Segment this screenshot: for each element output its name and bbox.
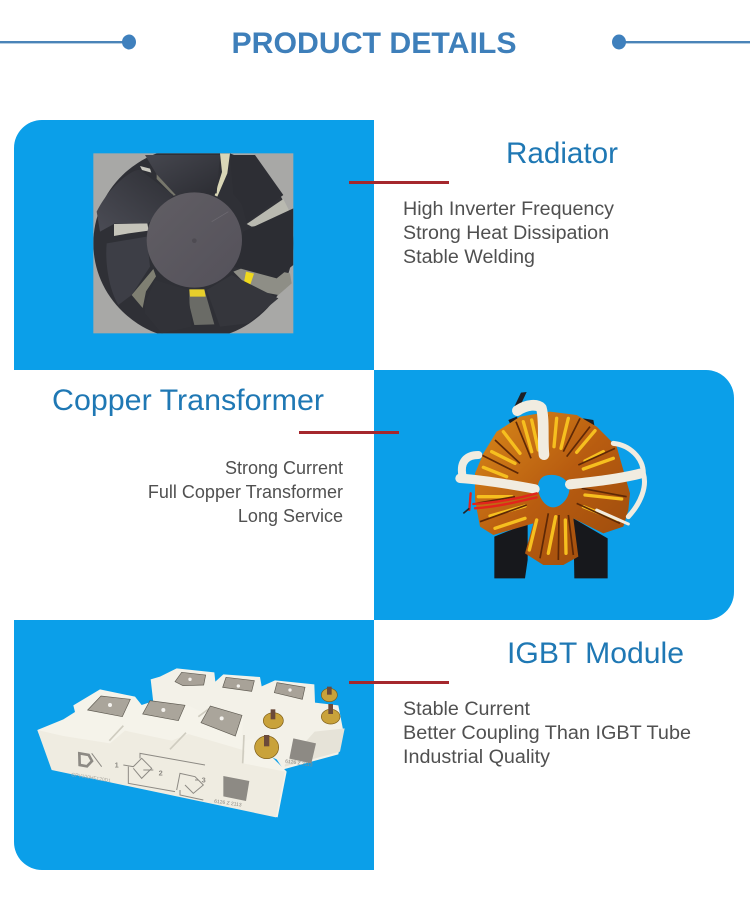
title: PRODUCT DETAILS — [232, 27, 516, 60]
feature list: Strong Heat Dissipation — [403, 222, 609, 244]
heading: Copper Transformer — [52, 384, 324, 417]
heading: Radiator — [506, 137, 618, 170]
groove shadows — [109, 707, 244, 763]
photo: igbt modules: 6126 Z 2113 — [285, 759, 313, 769]
feature list — [148, 458, 343, 526]
logo and circuit markings — [79, 753, 205, 800]
block front faces — [37, 730, 285, 817]
feature list — [403, 698, 691, 768]
fan disc — [93, 147, 293, 340]
fan blades — [97, 155, 293, 333]
rear module — [151, 668, 345, 769]
front module — [37, 689, 287, 817]
header: product details — [0, 27, 750, 60]
white insulation — [460, 405, 644, 524]
heading: IGBT Module — [507, 637, 684, 670]
feature list: Long Service — [238, 506, 343, 526]
feature list: Strong Current — [225, 458, 343, 478]
copper highlights — [478, 418, 622, 553]
blue panel — [374, 370, 734, 620]
photo: toroidal transformer — [460, 392, 644, 578]
copper coil ring — [475, 412, 630, 565]
blue panel — [14, 620, 374, 870]
panel: igbt module text — [349, 637, 691, 768]
panel: copper transformer image — [374, 370, 734, 620]
fan hub — [147, 192, 242, 288]
black feet — [494, 523, 528, 578]
photo: igbt modules — [37, 668, 345, 817]
photo: igbt modules: GPV100HF120D1 — [71, 772, 112, 784]
feature list: High Inverter Frequency — [403, 198, 614, 220]
photo: igbt modules: 1 — [115, 760, 119, 769]
panel: copper transformer text — [52, 384, 399, 526]
connector line — [299, 431, 399, 434]
panel: igbt module image — [14, 620, 374, 870]
feature list: Stable Welding — [403, 246, 535, 268]
right header rule with dot — [612, 34, 750, 50]
connector line — [349, 681, 449, 684]
connector line — [349, 181, 449, 184]
blue panel — [14, 120, 374, 370]
red wire — [469, 493, 537, 510]
photo: igbt modules: 2 — [159, 768, 163, 777]
gold screws — [255, 688, 340, 759]
feature list: Better Coupling Than IGBT Tube — [403, 722, 691, 744]
panel: radiator text — [349, 137, 618, 268]
feature list — [403, 198, 614, 268]
feature list: Full Copper Transformer — [148, 482, 343, 502]
data matrix codes — [223, 738, 316, 801]
feature list: Industrial Quality — [403, 746, 550, 768]
connector overlap — [374, 431, 399, 434]
gaps between blades — [114, 153, 292, 325]
photo: cooling fan — [93, 147, 293, 340]
photo: igbt modules: 6126 Z 2113 — [214, 799, 242, 809]
left header rule with dot — [0, 34, 136, 50]
photo: igbt modules: 3 — [202, 776, 206, 785]
panel: radiator image — [14, 120, 374, 370]
feature list: Stable Current — [403, 698, 531, 720]
terminals — [88, 672, 305, 736]
